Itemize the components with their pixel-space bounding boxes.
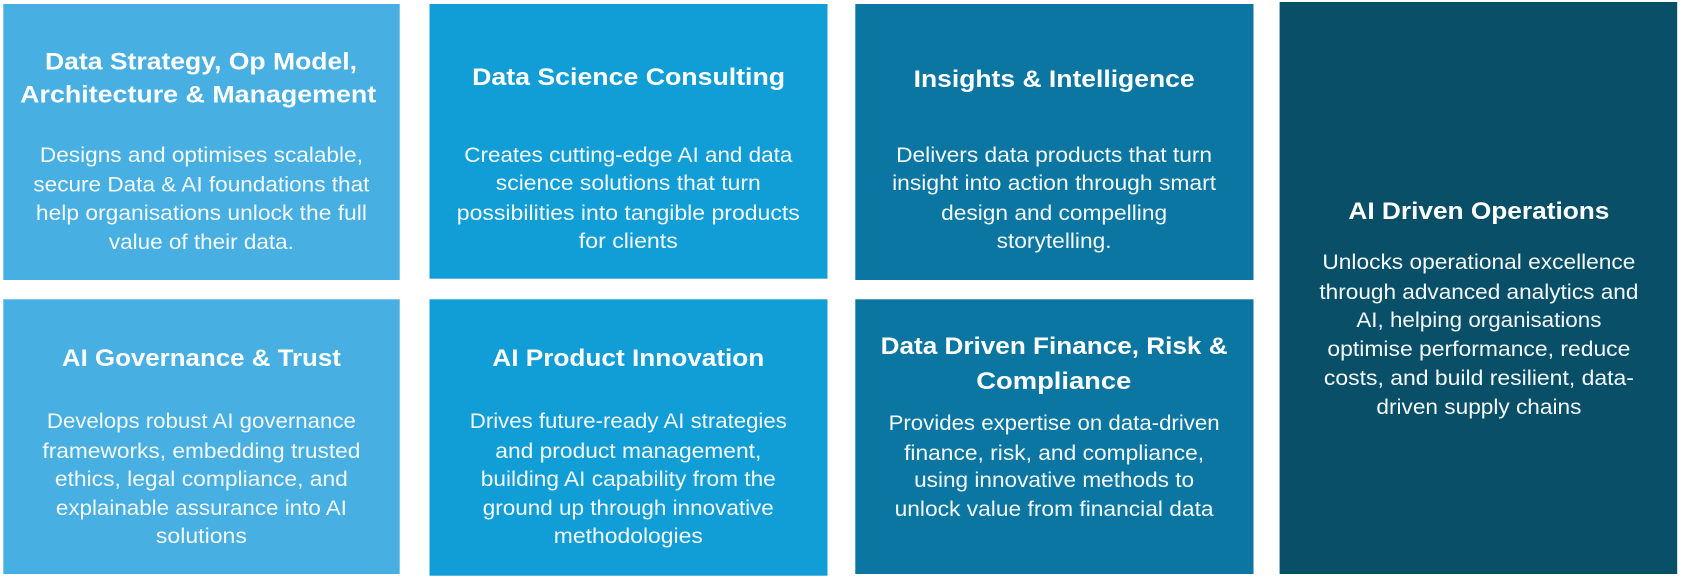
text: AI Governance & Trust description: solutions [156, 525, 247, 548]
text: AI Driven Operations description: driven supply chains [1376, 396, 1581, 419]
text: Data Driven Finance description [889, 412, 1220, 521]
text: AI Governance & Trust description: frameworks, embedding trusted [42, 440, 360, 463]
text: Data Science Consulting description: for clients [579, 230, 678, 253]
text: AI Governance & Trust description [42, 410, 360, 548]
text: Data Science Consulting description: science solutions that turn [496, 172, 761, 195]
text: Data Science Consulting description [457, 144, 800, 253]
text: Insights & Intelligence description: insight into action through smart [892, 172, 1216, 195]
text: AI Product Innovation description: and product management, [495, 440, 761, 463]
text: AI Governance & Trust description: Develops robust AI governance [47, 410, 356, 433]
text: Insights & Intelligence description: storytelling. [997, 230, 1112, 253]
text: Data Strategy description: value of their data. [109, 231, 294, 254]
panel: AI Driven Operations [1280, 2, 1677, 574]
heading: Data Strategy [20, 48, 376, 108]
text: AI Product Innovation description: ground up through innovative [483, 497, 774, 520]
heading: Data Strategy: Data Strategy, Op Model, [45, 48, 357, 75]
text: Insights & Intelligence description: Delivers data products that turn [896, 144, 1212, 167]
text: AI Product Innovation description [470, 410, 787, 548]
panel: Data Science Consulting [430, 4, 828, 279]
panel: AI Governance & Trust [3, 299, 400, 574]
text: AI Product Innovation description: Drives future-ready AI strategies [470, 410, 787, 433]
heading: Data Driven Finance, Risk & Compliance: Compliance [976, 368, 1131, 395]
text: Data Strategy description: help organisations unlock the full [36, 202, 367, 225]
heading: Data Science Consulting: Data Science Consulting [472, 64, 785, 91]
text: Data Driven Finance description: unlock value from financial data [895, 498, 1214, 521]
heading: Data Strategy: Architecture & Management [20, 82, 376, 108]
text: Data Science Consulting description: possibilities into tangible products [457, 202, 800, 225]
text: Data Science Consulting description: Creates cutting-edge AI and data [464, 144, 793, 167]
text: Insights & Intelligence description: design and compelling [941, 202, 1167, 225]
text: AI Driven Operations description: costs, and build resilient, data- [1324, 367, 1634, 390]
heading: AI Governance & Trust: AI Governance & Trust [62, 345, 341, 372]
heading: Insights & Intelligence: Insights & Intelligence [914, 66, 1195, 93]
text: Insights & Intelligence description [892, 144, 1216, 253]
text: AI Product Innovation description: methodologies [554, 525, 703, 548]
panel: Data Driven Finance, Risk & Compliance [855, 299, 1254, 574]
text: AI Product Innovation description: building AI capability from the [481, 468, 776, 491]
text: AI Driven Operations description: Unlocks operational excellence [1322, 251, 1635, 274]
text: Data Driven Finance description: finance, risk, and compliance, [904, 442, 1204, 465]
panel: Insights & Intelligence [855, 4, 1254, 280]
text: AI Governance & Trust description: ethics, legal compliance, and [55, 468, 348, 491]
heading: Data Driven Finance, Risk & Compliance [881, 333, 1228, 395]
text: Data Driven Finance description: Provides expertise on data-driven [889, 412, 1220, 435]
panel: Data Strategy, Op Model, Architecture & Management [3, 4, 400, 280]
heading: AI Driven Operations: AI Driven Operations [1348, 198, 1609, 225]
heading: AI Product Innovation: AI Product Innovation [492, 345, 764, 372]
panel: AI Product Innovation [430, 299, 828, 576]
text: Data Strategy description: Designs and optimises scalable, [40, 144, 363, 167]
text: AI Driven Operations description: through advanced analytics and [1319, 281, 1638, 304]
text: Data Strategy description [33, 144, 370, 254]
text: AI Driven Operations description: optimise performance, reduce [1327, 338, 1630, 361]
text: Data Driven Finance description: using innovative methods to [914, 469, 1194, 492]
text: AI Governance & Trust description: explainable assurance into AI [56, 497, 347, 520]
text: AI Driven Operations description: AI, helping organisations [1356, 309, 1601, 332]
heading: Data Driven Finance, Risk & Compliance: Data Driven Finance, Risk & [881, 333, 1228, 360]
text: AI Driven Operations description [1319, 251, 1638, 419]
text: Data Strategy description: secure Data & AI foundations that [33, 174, 370, 196]
